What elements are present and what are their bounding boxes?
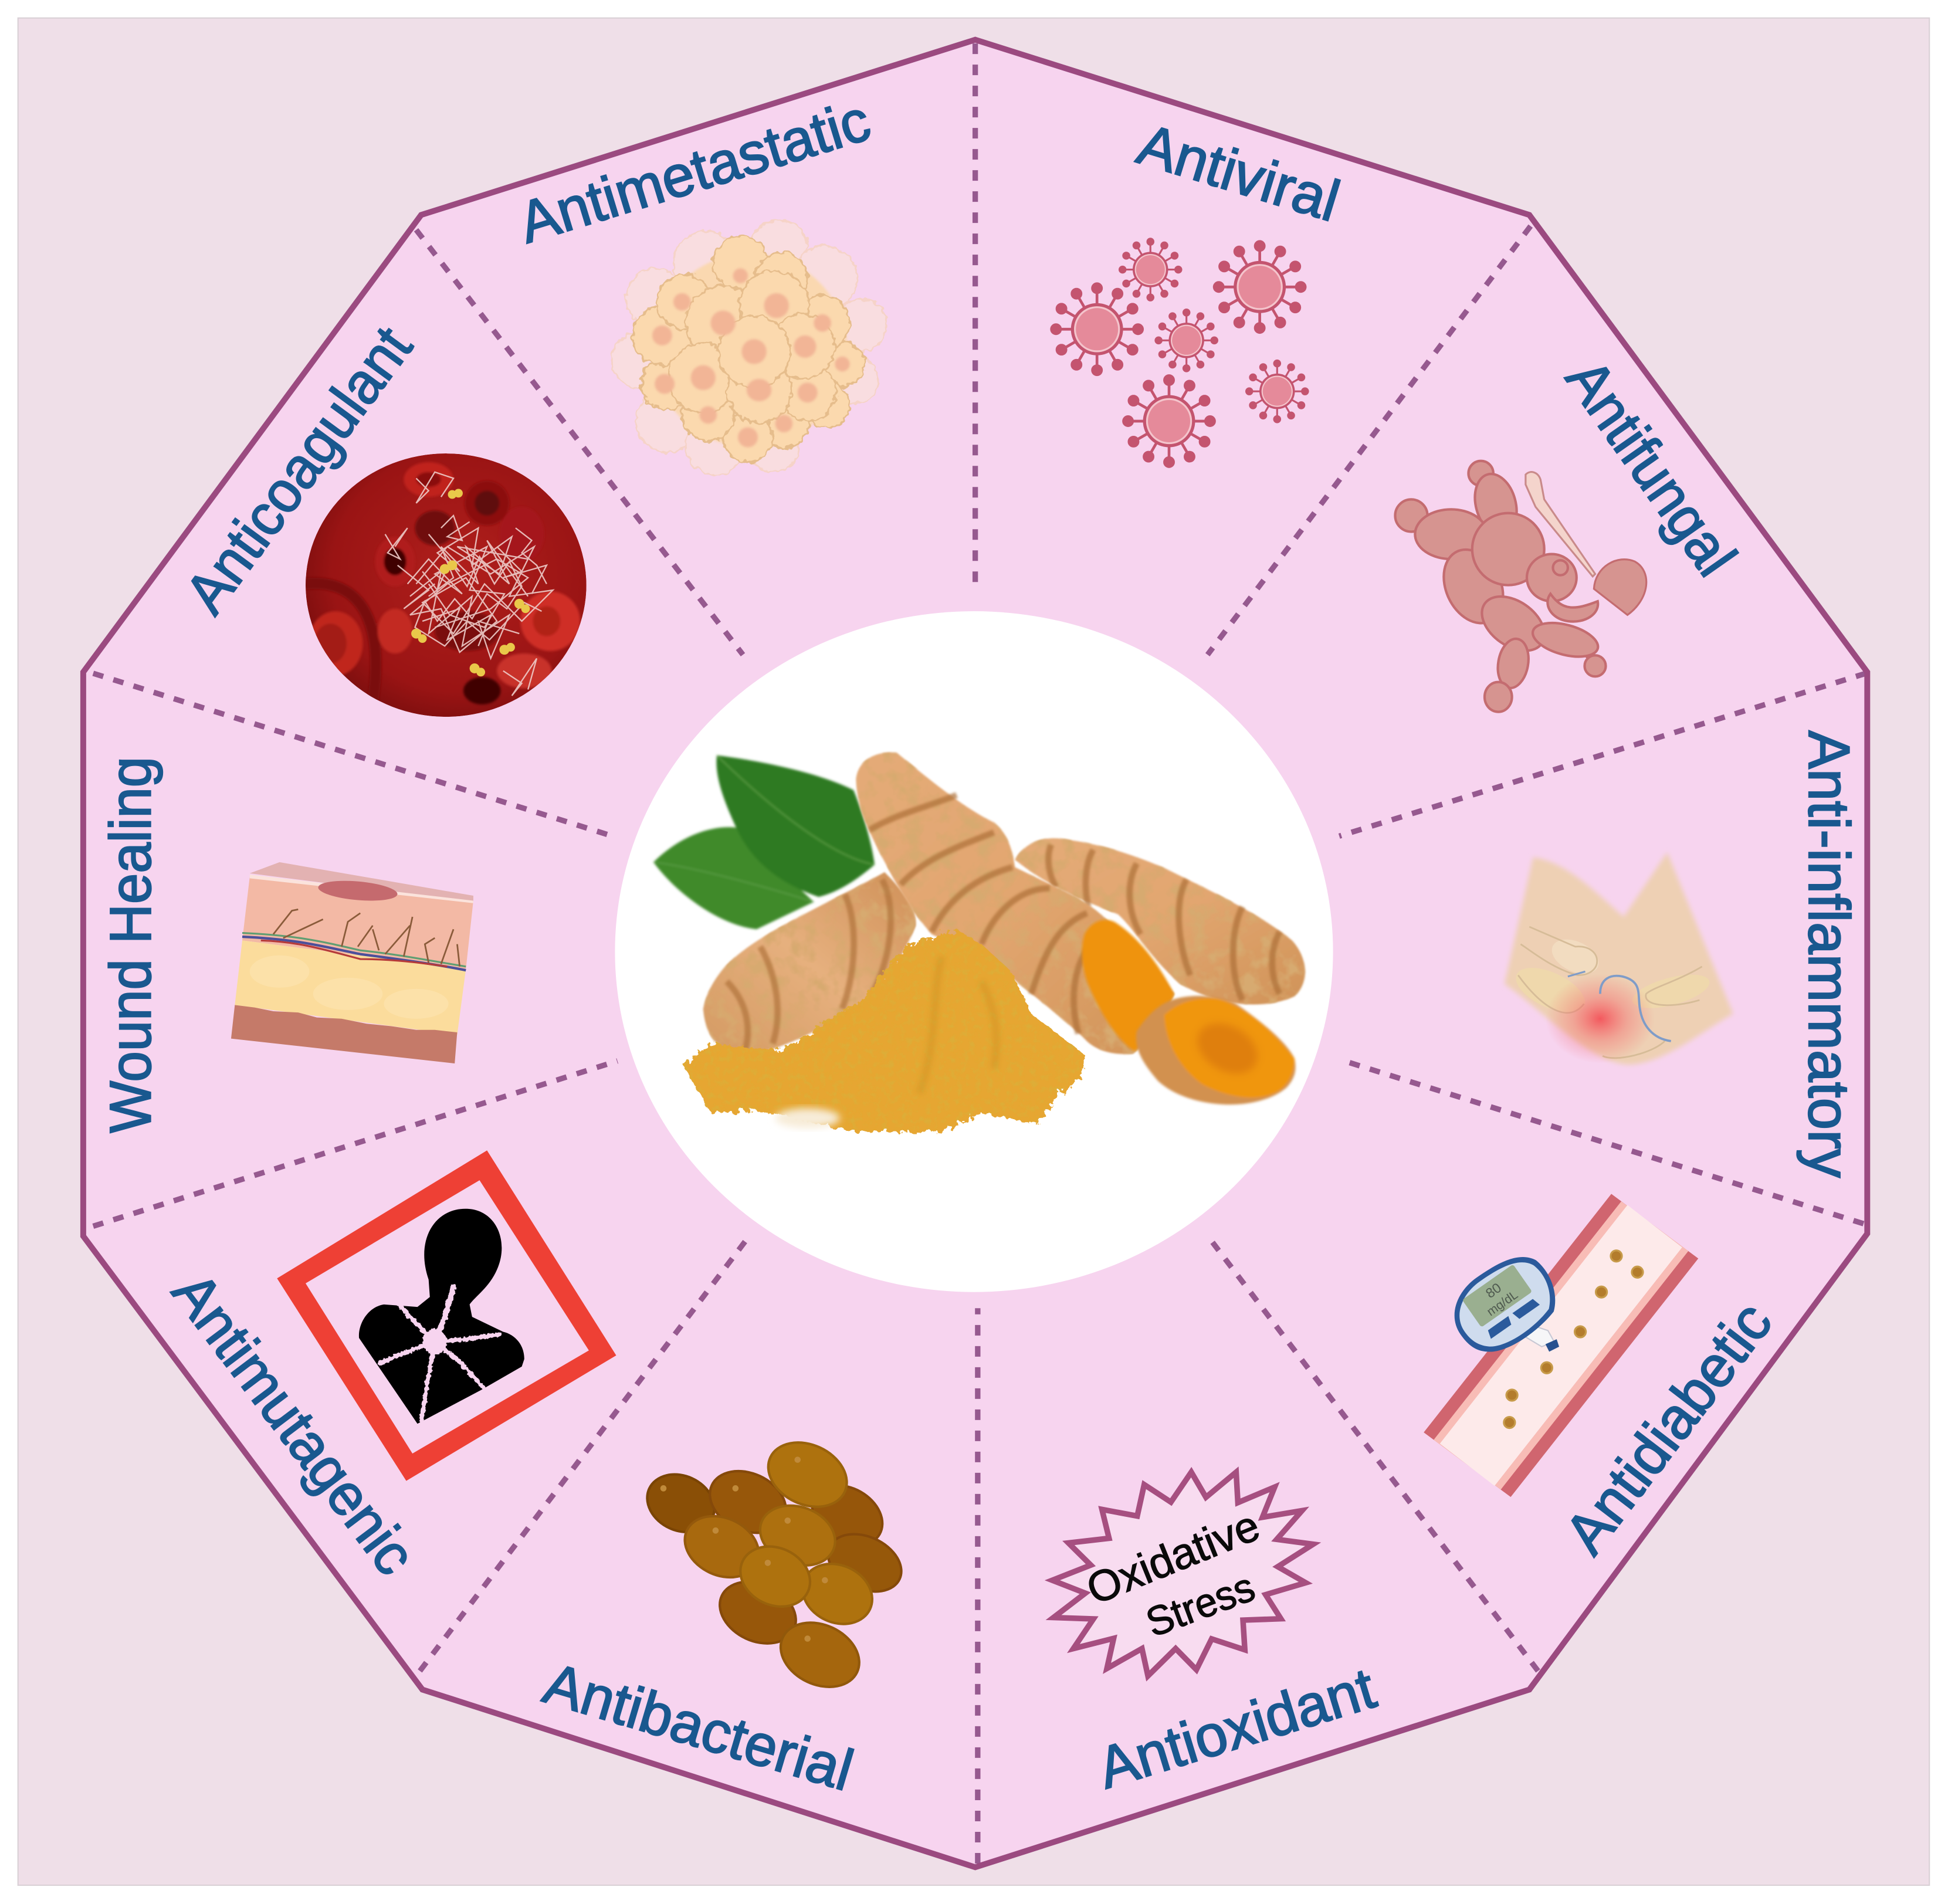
panel: antimutagenic [83,1061,746,1689]
icon: bacteria cluster [638,1430,910,1699]
heading: Antioxidant: Antioxidant [1090,1655,1383,1801]
panel: antiviral [975,40,1529,655]
heading: Antimetastatic: Antimetastatic [511,87,878,256]
turmeric powder [683,929,1085,1131]
panel: antimetastatic [421,40,975,655]
icon: health hazard pictogram [277,1150,616,1481]
cut slice [1136,996,1296,1105]
icon: blood vessel with glucometer [1424,1194,1698,1497]
heading: Antidiabetic: Antidiabetic [1553,1290,1784,1566]
rhizome: right [1015,838,1305,1005]
heading: Antibacterial: Antibacterial [537,1651,860,1804]
icon: glucometer [1439,1243,1570,1367]
leaves [653,755,875,929]
icon: oxidative stress burst [1052,1472,1313,1676]
panel: antioxidant [975,1242,1529,1867]
icon: inflamed joint [1505,852,1733,1065]
rhizome: left [703,872,916,1054]
panel: antibacterial [422,1241,978,1867]
heading: Antifungal: Antifungal [1554,348,1749,588]
panel: antifungal [1208,215,1867,836]
heading: Anti-inflammatory: Anti-inflammatory [1796,730,1861,1178]
heading: Antimutagenic: Antimutagenic [160,1261,428,1587]
icon: viruses [1052,239,1308,467]
image: turmeric roots, leaves and powder [653,753,1305,1131]
heading: Anticoagulant: Anticoagulant [173,315,425,625]
heading: Antiviral: Antiviral [1130,111,1347,234]
centre circle [615,611,1333,1292]
icon: tumour cell cluster [611,220,887,475]
panel: wound healing [83,672,618,1236]
icon: blood clot [304,453,587,717]
panel: anticoagulant [191,327,587,717]
icon: fungal hyphae [1395,461,1647,712]
heading: Wound Healing: Wound Healing [98,757,163,1133]
icon: glucometer: mg/dL [1485,1288,1520,1319]
icon: glucometer: 80 [1483,1280,1504,1301]
panel: anti-inflammatory [1339,672,1867,1234]
rhizome: centre [856,753,1174,1054]
panel: antidiabetic [1212,1061,1867,1689]
label: Stress: Stress [1140,1564,1261,1646]
label: Oxidative: Oxidative [1080,1500,1266,1614]
icon: skin cross-section [231,862,473,1063]
